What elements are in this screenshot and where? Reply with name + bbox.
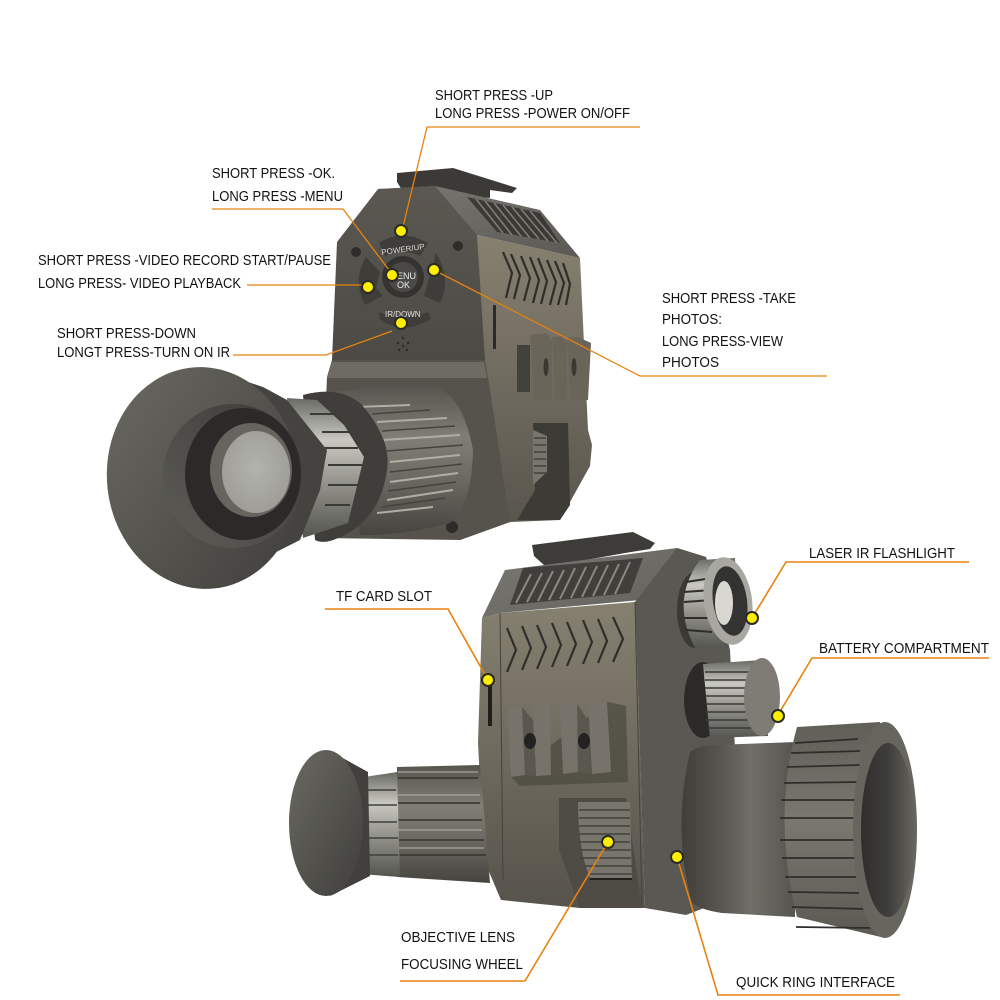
side slot bbox=[493, 305, 496, 349]
callout: IR down: SHORT PRESS-DOWN bbox=[57, 325, 196, 342]
callout: power up: SHORT PRESS -UP bbox=[435, 87, 553, 104]
callout: menu ok: LONG PRESS -MENU bbox=[212, 188, 343, 205]
eyecup bbox=[330, 751, 370, 896]
button: photo right bbox=[424, 253, 445, 303]
callout: take photos bbox=[428, 264, 827, 376]
callout: quick ring interface: QUICK RING INTERFACE bbox=[736, 974, 895, 991]
callout: laser IR flashlight bbox=[746, 545, 969, 624]
side vent slots bbox=[503, 252, 570, 305]
callout: take photos: LONG PRESS-VIEW bbox=[662, 333, 784, 350]
callout: menu ok: SHORT PRESS -OK. bbox=[212, 165, 335, 182]
lower body bbox=[320, 360, 510, 540]
dark retaining ring bbox=[303, 392, 388, 542]
screw holes bbox=[351, 247, 361, 257]
device: lower scope front view bbox=[289, 532, 917, 938]
callout: objective lens focusing wheel bbox=[400, 836, 614, 981]
callout: take photos: PHOTOS bbox=[662, 354, 719, 371]
callout: menu ok bbox=[212, 165, 398, 281]
objective front opening bbox=[853, 722, 917, 938]
top rail bbox=[397, 168, 517, 198]
chevron vents bbox=[507, 617, 623, 672]
battery cap knob bbox=[684, 658, 780, 738]
right front panel bbox=[635, 548, 735, 915]
ribbed barrel bbox=[333, 385, 473, 535]
side notch with focus wheel bbox=[517, 423, 570, 520]
callout: take photos: PHOTOS: bbox=[662, 311, 722, 328]
left barrel bbox=[397, 765, 490, 883]
button: power up bbox=[379, 236, 428, 256]
device: upper scope rear view: POWER/UP bbox=[381, 242, 425, 257]
focus wheel window bbox=[559, 798, 642, 908]
button: IR down bbox=[379, 312, 431, 328]
device: upper scope rear view: OK bbox=[397, 280, 410, 290]
quick ring tube bbox=[681, 742, 797, 917]
rear face bbox=[332, 186, 485, 360]
callout: take photos: SHORT PRESS -TAKE bbox=[662, 290, 796, 307]
callout: IR down: LONGT PRESS-TURN ON IR bbox=[57, 344, 230, 361]
eyecup bbox=[96, 358, 310, 598]
callout: TF card slot: TF CARD SLOT bbox=[336, 588, 432, 605]
device: upper scope rear view: IR/DOWN bbox=[385, 310, 421, 319]
top sloped panel bbox=[378, 186, 580, 258]
callout: quick ring interface bbox=[671, 851, 900, 995]
top grille bbox=[510, 558, 643, 605]
callout: TF card slot bbox=[325, 588, 494, 686]
rail shadow bbox=[510, 702, 628, 786]
speaker holes bbox=[397, 337, 409, 351]
device: upper scope rear view: ENU bbox=[397, 271, 416, 281]
device: upper scope rear view bbox=[96, 168, 592, 598]
eyecup collar bbox=[203, 367, 327, 589]
callout: laser IR flashlight: LASER IR FLASHLIGHT bbox=[809, 545, 955, 562]
eyepiece lens bbox=[222, 431, 290, 513]
callout: video record: SHORT PRESS -VIDEO RECORD START/PAUSE bbox=[38, 252, 331, 269]
callout: video record bbox=[38, 252, 374, 293]
button: menu ok bbox=[382, 256, 424, 298]
callout: video record: LONG PRESS- VIDEO PLAYBACK bbox=[38, 275, 241, 292]
silver knurled ring bbox=[287, 398, 364, 538]
callout: objective lens focusing wheel: OBJECTIVE LENS bbox=[401, 929, 515, 946]
laser flashlight bbox=[677, 554, 758, 648]
side panel bbox=[460, 235, 592, 540]
callout: IR down bbox=[57, 317, 407, 361]
callout: battery compartment bbox=[772, 640, 989, 722]
panel seam lines bbox=[500, 602, 642, 905]
silver eyepiece ring bbox=[358, 772, 400, 877]
TF slot bbox=[488, 686, 492, 726]
side rail blocks bbox=[507, 702, 611, 777]
callout: power up: LONG PRESS -POWER ON/OFF bbox=[435, 105, 630, 122]
top rail bbox=[532, 532, 655, 566]
callout: objective lens focusing wheel: FOCUSING WHEEL bbox=[401, 956, 523, 973]
side rail blocks bbox=[517, 333, 591, 400]
callout: power up bbox=[395, 87, 640, 237]
objective ring bbox=[784, 722, 885, 938]
top panel bbox=[482, 548, 730, 650]
button: video left bbox=[359, 257, 383, 305]
side panel with chevron vents bbox=[478, 602, 645, 908]
top grille bbox=[467, 197, 560, 243]
